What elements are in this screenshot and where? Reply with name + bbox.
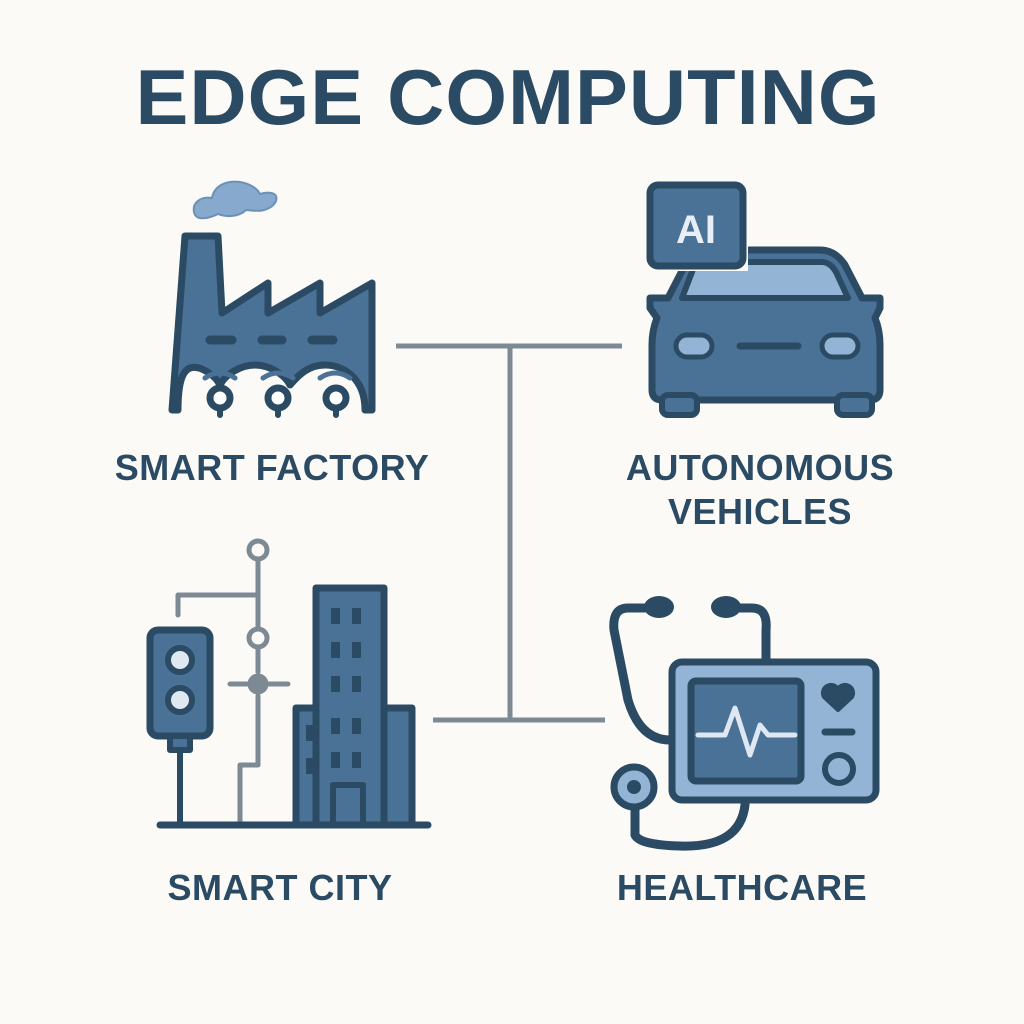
label: healthcare: HEALTHCARE [617, 867, 867, 908]
icon: autonomous vehicle: AI [676, 208, 716, 252]
icon: autonomous vehicle [645, 180, 880, 415]
icon: smart city [150, 541, 428, 825]
label: autonomous vehicles: AUTONOMOUS [626, 447, 894, 488]
text: VEHICLES [668, 491, 852, 532]
label: smart city: SMART CITY [168, 867, 392, 908]
icon: healthcare [614, 596, 876, 846]
connector lines [396, 346, 622, 720]
title: EDGE COMPUTING [136, 53, 880, 141]
label: smart factory: SMART FACTORY [115, 447, 429, 488]
icon: smart factory [172, 182, 372, 415]
